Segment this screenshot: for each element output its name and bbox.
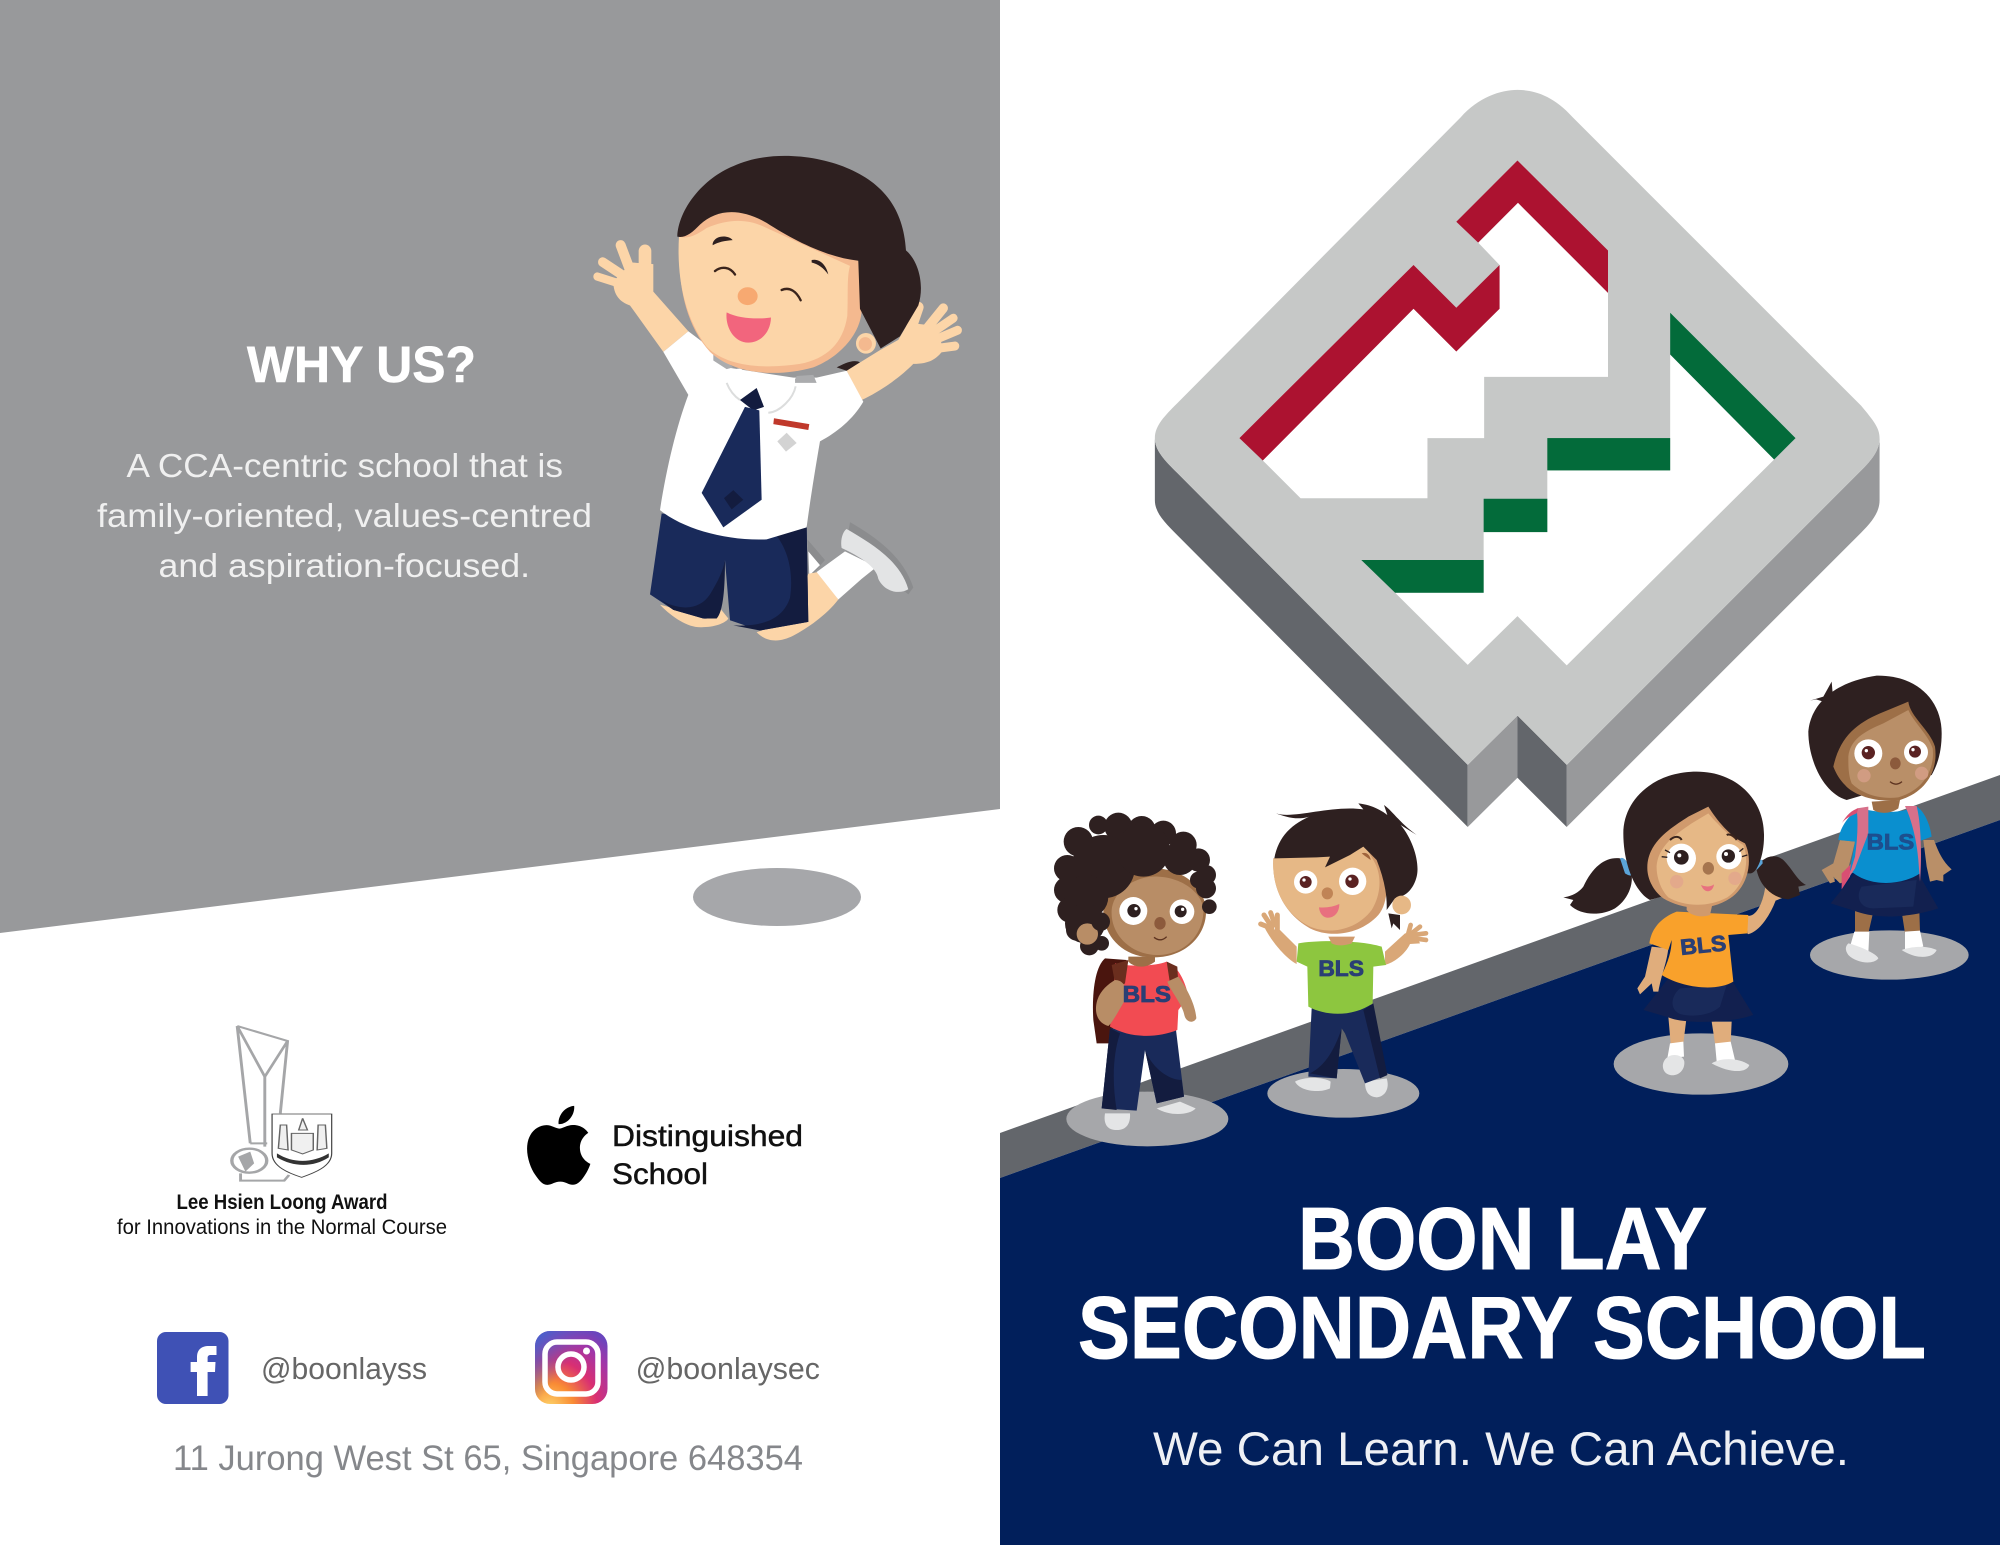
award caption: Lee Hsien Loong Award [176, 1191, 388, 1214]
illustration: girl student, blue shirt: BLS [1867, 829, 1914, 854]
text block: why us description [97, 448, 592, 585]
heading: why us: WHY US? [247, 336, 476, 393]
illustration: girl student, orange shirt [1563, 772, 1806, 1095]
illustration: boy student, green shirt: BLS [1318, 956, 1364, 981]
text block: why us description: and aspiration-focused. [158, 548, 530, 585]
illustration: curly-haired student, red shirt: BLS [1123, 981, 1171, 1007]
jump shadow [693, 868, 861, 926]
illustration: curly-haired student, red shirt [1054, 813, 1228, 1146]
text: facebook handle: @boonlayss [261, 1351, 427, 1386]
illustration: boy student, green shirt [1261, 803, 1426, 1118]
panel: navy title area [1000, 820, 2000, 1545]
title: school name: BOON LAY [1298, 1189, 1707, 1288]
text: instagram handle: @boonlaysec [636, 1351, 820, 1386]
icon: apple logo [527, 1106, 590, 1185]
text block: why us description: A CCA-centric school that is [126, 448, 563, 485]
illustration: girl student, orange shirt: BLS [1679, 930, 1727, 960]
award caption [117, 1191, 447, 1239]
text block: why us description: family-oriented, values-centred [97, 498, 592, 535]
text: distinguished school: School [612, 1158, 708, 1191]
text: motto: We Can Learn. We Can Achieve. [1153, 1422, 1849, 1475]
award: Lee Hsien Loong Award trophy [232, 1026, 332, 1181]
illustration: girl student, blue shirt [1808, 676, 1969, 980]
text: distinguished school: Distinguished [612, 1120, 803, 1153]
illustration: jumping student [597, 156, 958, 640]
text: address: 11 Jurong West St 65, Singapore 648354 [173, 1439, 803, 1478]
title: school name [1078, 1189, 1926, 1377]
icon: instagram [535, 1331, 608, 1404]
icon: facebook [157, 1332, 228, 1404]
award caption: for Innovations in the Normal Course [117, 1216, 447, 1239]
panel: grey why-us area [0, 0, 1000, 933]
logo: school diamond emblem [1155, 90, 1880, 827]
panel: grey kerb stripe [1000, 775, 2000, 1178]
text: distinguished school [612, 1120, 803, 1191]
